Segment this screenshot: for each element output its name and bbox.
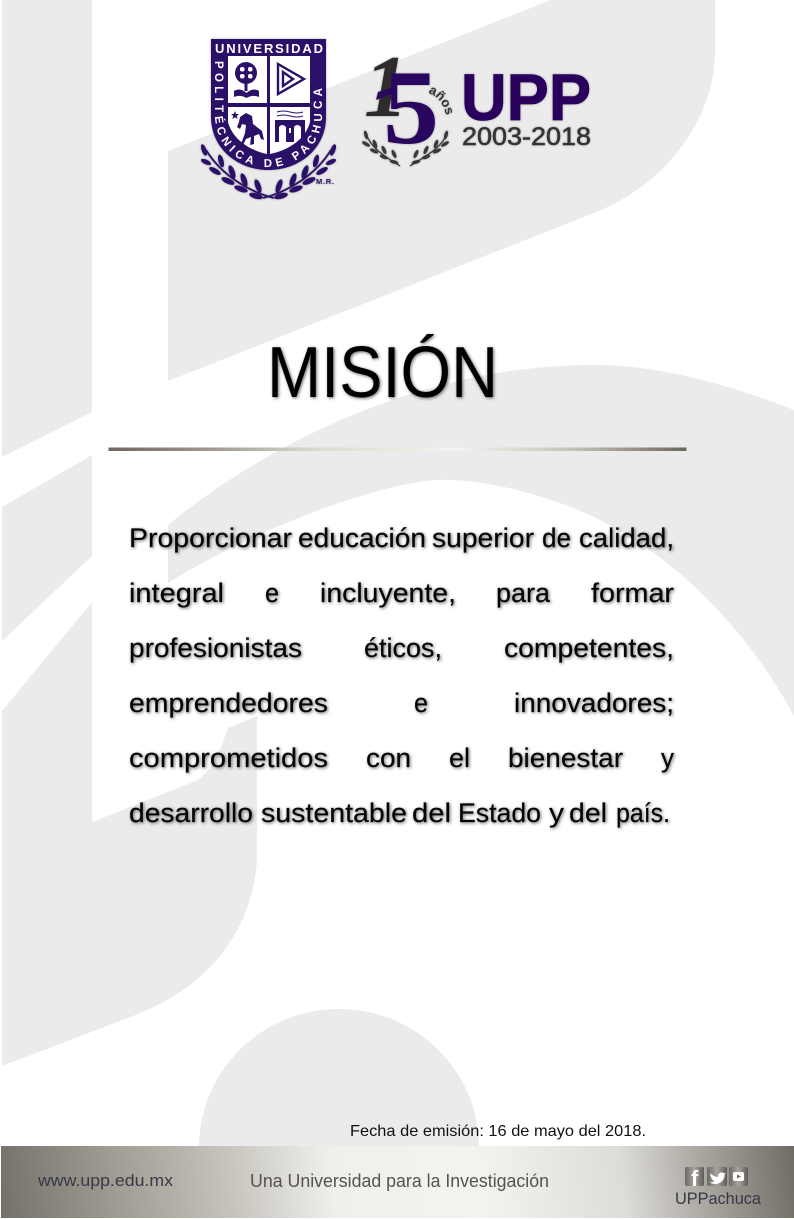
line 5: comprometidos (129, 743, 328, 773)
shield ring text: POLITÉCNICA DE PACHUCA (214, 62, 322, 168)
icon: youtube (729, 1167, 748, 1186)
line 1: educación (298, 523, 426, 553)
line 6 (129, 798, 670, 828)
numeral 1: 1 (364, 39, 408, 136)
line 2: para (496, 578, 550, 608)
line 3: éticos, (364, 633, 442, 663)
issue date: Fecha de emisión: 16 de mayo del 2018. (350, 1123, 646, 1140)
shield body (211, 39, 326, 170)
anos label: años (428, 86, 454, 116)
line 3: profesionistas (129, 633, 302, 663)
line 6: del (569, 798, 607, 828)
line 4: emprendedores (129, 688, 328, 718)
slogan: Una Universidad para la Investigación (250, 1170, 549, 1191)
icon: twitter (707, 1167, 727, 1186)
social handle: UPPachuca (675, 1190, 762, 1208)
line 5: bienestar (508, 743, 623, 773)
line 5: el (449, 743, 470, 773)
line 1: de (542, 523, 571, 553)
line 6: país. (616, 798, 670, 828)
line 5: con (366, 743, 411, 773)
line 4 (129, 688, 674, 718)
shield title: UNIVERSIDAD: UNIVERSIDAD (215, 41, 323, 56)
line 6: y (549, 798, 565, 828)
icon: facebook (685, 1166, 704, 1191)
shield quadrants (228, 56, 310, 154)
line 6: del (412, 798, 451, 828)
line 6: desarrollo (129, 798, 253, 828)
line 2: incluyente, (320, 578, 456, 608)
line 5: y (661, 743, 675, 773)
divider (108, 448, 686, 451)
logo: 15 anos UPP 2003-2018 (361, 39, 592, 168)
line 1: Proporcionar (129, 523, 292, 553)
mission statement (129, 523, 675, 828)
M.R. mark: M.R. (316, 177, 334, 186)
years: 2003-2018 (462, 123, 591, 151)
icon: tree and book (234, 62, 259, 98)
line 3 (129, 633, 674, 663)
numeral 5: 5 (383, 49, 439, 166)
logo: Universidad Politecnica de Pachuca shield (200, 38, 338, 200)
line 3: competentes, (504, 633, 674, 663)
line 2 (129, 578, 674, 608)
wreath: shield (200, 144, 274, 201)
icon: facebook: f (691, 1166, 699, 1191)
line 2: e (265, 578, 279, 608)
icon: rearing horse and star (231, 111, 264, 145)
line 1 (129, 523, 674, 553)
line 4: e (414, 688, 428, 718)
line 6: Estado (458, 798, 541, 828)
line 5 (129, 743, 675, 773)
website: www.upp.edu.mx (37, 1172, 174, 1190)
icon: aqueduct (275, 111, 305, 142)
line 4: innovadores; (514, 688, 674, 718)
footer band (1, 1146, 794, 1218)
wreath: 15 (361, 130, 450, 166)
line 6: sustentable (261, 798, 407, 828)
line 1: superior (432, 523, 534, 553)
icon: triangles (278, 64, 304, 94)
UPP wordmark: UPP (461, 60, 591, 134)
line 1: calidad, (579, 523, 674, 553)
line 2: integral (129, 578, 224, 608)
line 2: formar (591, 578, 674, 608)
title: MISIÓN (267, 333, 498, 413)
